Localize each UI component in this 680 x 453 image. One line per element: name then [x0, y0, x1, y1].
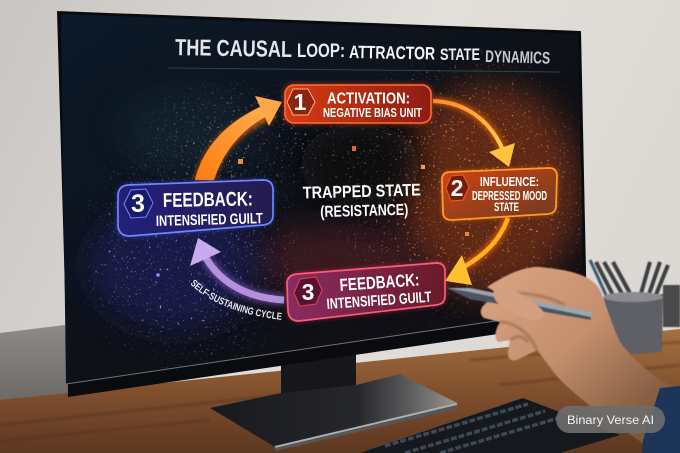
title: DYNAMICS	[485, 47, 550, 68]
node 1: activation	[284, 84, 432, 124]
node 1 text	[323, 90, 422, 120]
cycle label: SELF-SUSTAINING CYCLE	[191, 280, 282, 320]
center label: (RESISTANCE)	[320, 202, 409, 221]
title divider	[168, 68, 560, 72]
number badge 3 pink	[294, 277, 322, 306]
pen	[447, 288, 592, 320]
arrow: influence to feedback	[445, 218, 508, 285]
watermark badge	[556, 406, 665, 433]
node 1 text: ACTIVATION:	[327, 90, 410, 108]
number badge 3 blue	[124, 189, 153, 218]
blue node text: FEEDBACK:	[163, 188, 253, 212]
shirt sleeve	[642, 386, 680, 453]
title: STATE	[440, 45, 480, 64]
grey dado panel	[0, 325, 68, 402]
number badge 1: 1	[294, 89, 307, 115]
node 2 text: DEPRESSED MOOD	[472, 189, 547, 203]
node 3: pink feedback	[287, 263, 445, 321]
pink node text	[326, 269, 432, 313]
title	[175, 34, 550, 68]
title: ATTRACTOR	[349, 42, 435, 64]
title: THE CAUSAL	[175, 34, 292, 62]
thumb	[493, 288, 544, 320]
number badge 3 pink: 3	[302, 279, 314, 305]
center label	[303, 180, 422, 221]
arrow: activation to influence	[433, 101, 515, 167]
number badge 1	[287, 89, 315, 115]
monitor stand	[210, 350, 457, 451]
node 1 text: NEGATIVE BIAS UNIT	[323, 106, 422, 120]
blue node text: INTENSIFIED GUILT	[156, 210, 263, 230]
wooden desk	[0, 329, 680, 453]
arrow: feedback to activation	[195, 96, 282, 180]
finger shading	[500, 293, 565, 350]
blue node text	[156, 188, 263, 230]
pencil holder with pens	[590, 260, 680, 356]
nebula glow	[90, 85, 580, 330]
node 2 text: STATE	[494, 202, 519, 214]
screen bezel highlight	[66, 308, 584, 384]
star particles	[70, 50, 590, 380]
number badge 3 blue: 3	[131, 190, 145, 218]
node 2 text	[472, 174, 547, 214]
center label: TRAPPED STATE	[303, 180, 421, 202]
pink node text: FEEDBACK:	[339, 269, 420, 295]
screen background	[50, 10, 595, 390]
pink node text: INTENSIFIED GUILT	[326, 289, 432, 313]
monitor body	[57, 11, 587, 397]
node 2: influence	[442, 168, 557, 220]
hand holding pen	[447, 267, 675, 445]
watermark badge: Binary Verse AI	[567, 413, 654, 427]
number badge 2: 2	[451, 175, 463, 201]
screen	[50, 10, 595, 390]
title: LOOP:	[297, 41, 345, 62]
node 3: blue feedback	[118, 180, 273, 236]
arrow: self-sustaining return	[190, 238, 284, 300]
node 2 text: INFLUENCE:	[480, 174, 539, 189]
keyboard	[360, 398, 620, 453]
